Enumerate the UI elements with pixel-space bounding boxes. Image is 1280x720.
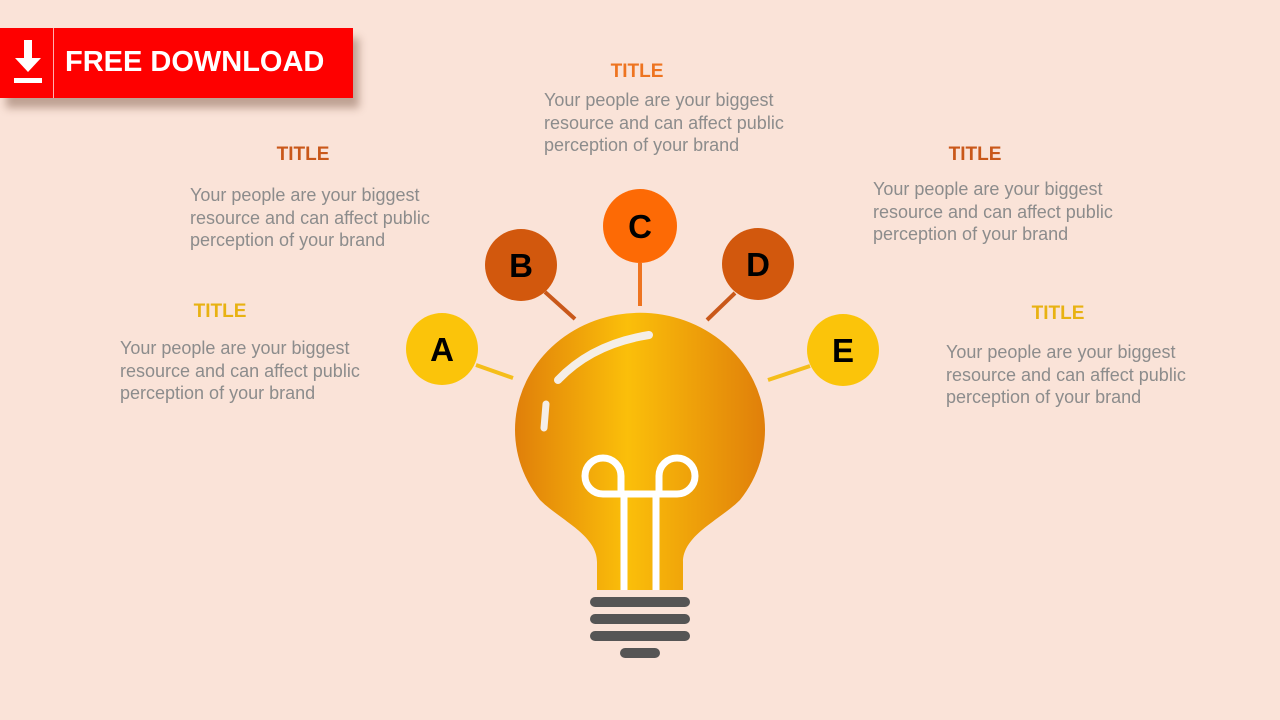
bulb base [595,602,685,653]
text D: Your people are your biggest resource and can affect public perception of your brand [873,179,1113,244]
circle E: E [832,332,854,369]
circle A: A [430,331,454,368]
circle D: D [746,246,770,283]
circle E [807,314,879,386]
title C: TITLE [611,61,663,82]
banner: free download [0,28,353,98]
text B: Your people are your biggest resource and can affect public perception of your brand [190,185,430,250]
text A: Your people are your biggest resource and can affect public perception of your brand [120,338,360,403]
circle C: C [628,208,652,245]
circle D [722,228,794,300]
text E: Your people are your biggest resource and can affect public perception of your brand [946,342,1186,407]
title A: TITLE [194,301,246,322]
icon: download arrow [14,40,42,83]
bulb [515,313,765,590]
connectors [476,263,810,380]
text C: Your people are your biggest resource and can affect public perception of your brand [544,90,784,155]
title D: TITLE [949,144,1001,165]
title E: TITLE [1032,303,1084,324]
circle A [406,313,478,385]
banner text: FREE DOWNLOAD [65,46,324,78]
circle B: B [509,247,533,284]
circle C [603,189,677,263]
circle B [485,229,557,301]
title B: TITLE [277,144,329,165]
